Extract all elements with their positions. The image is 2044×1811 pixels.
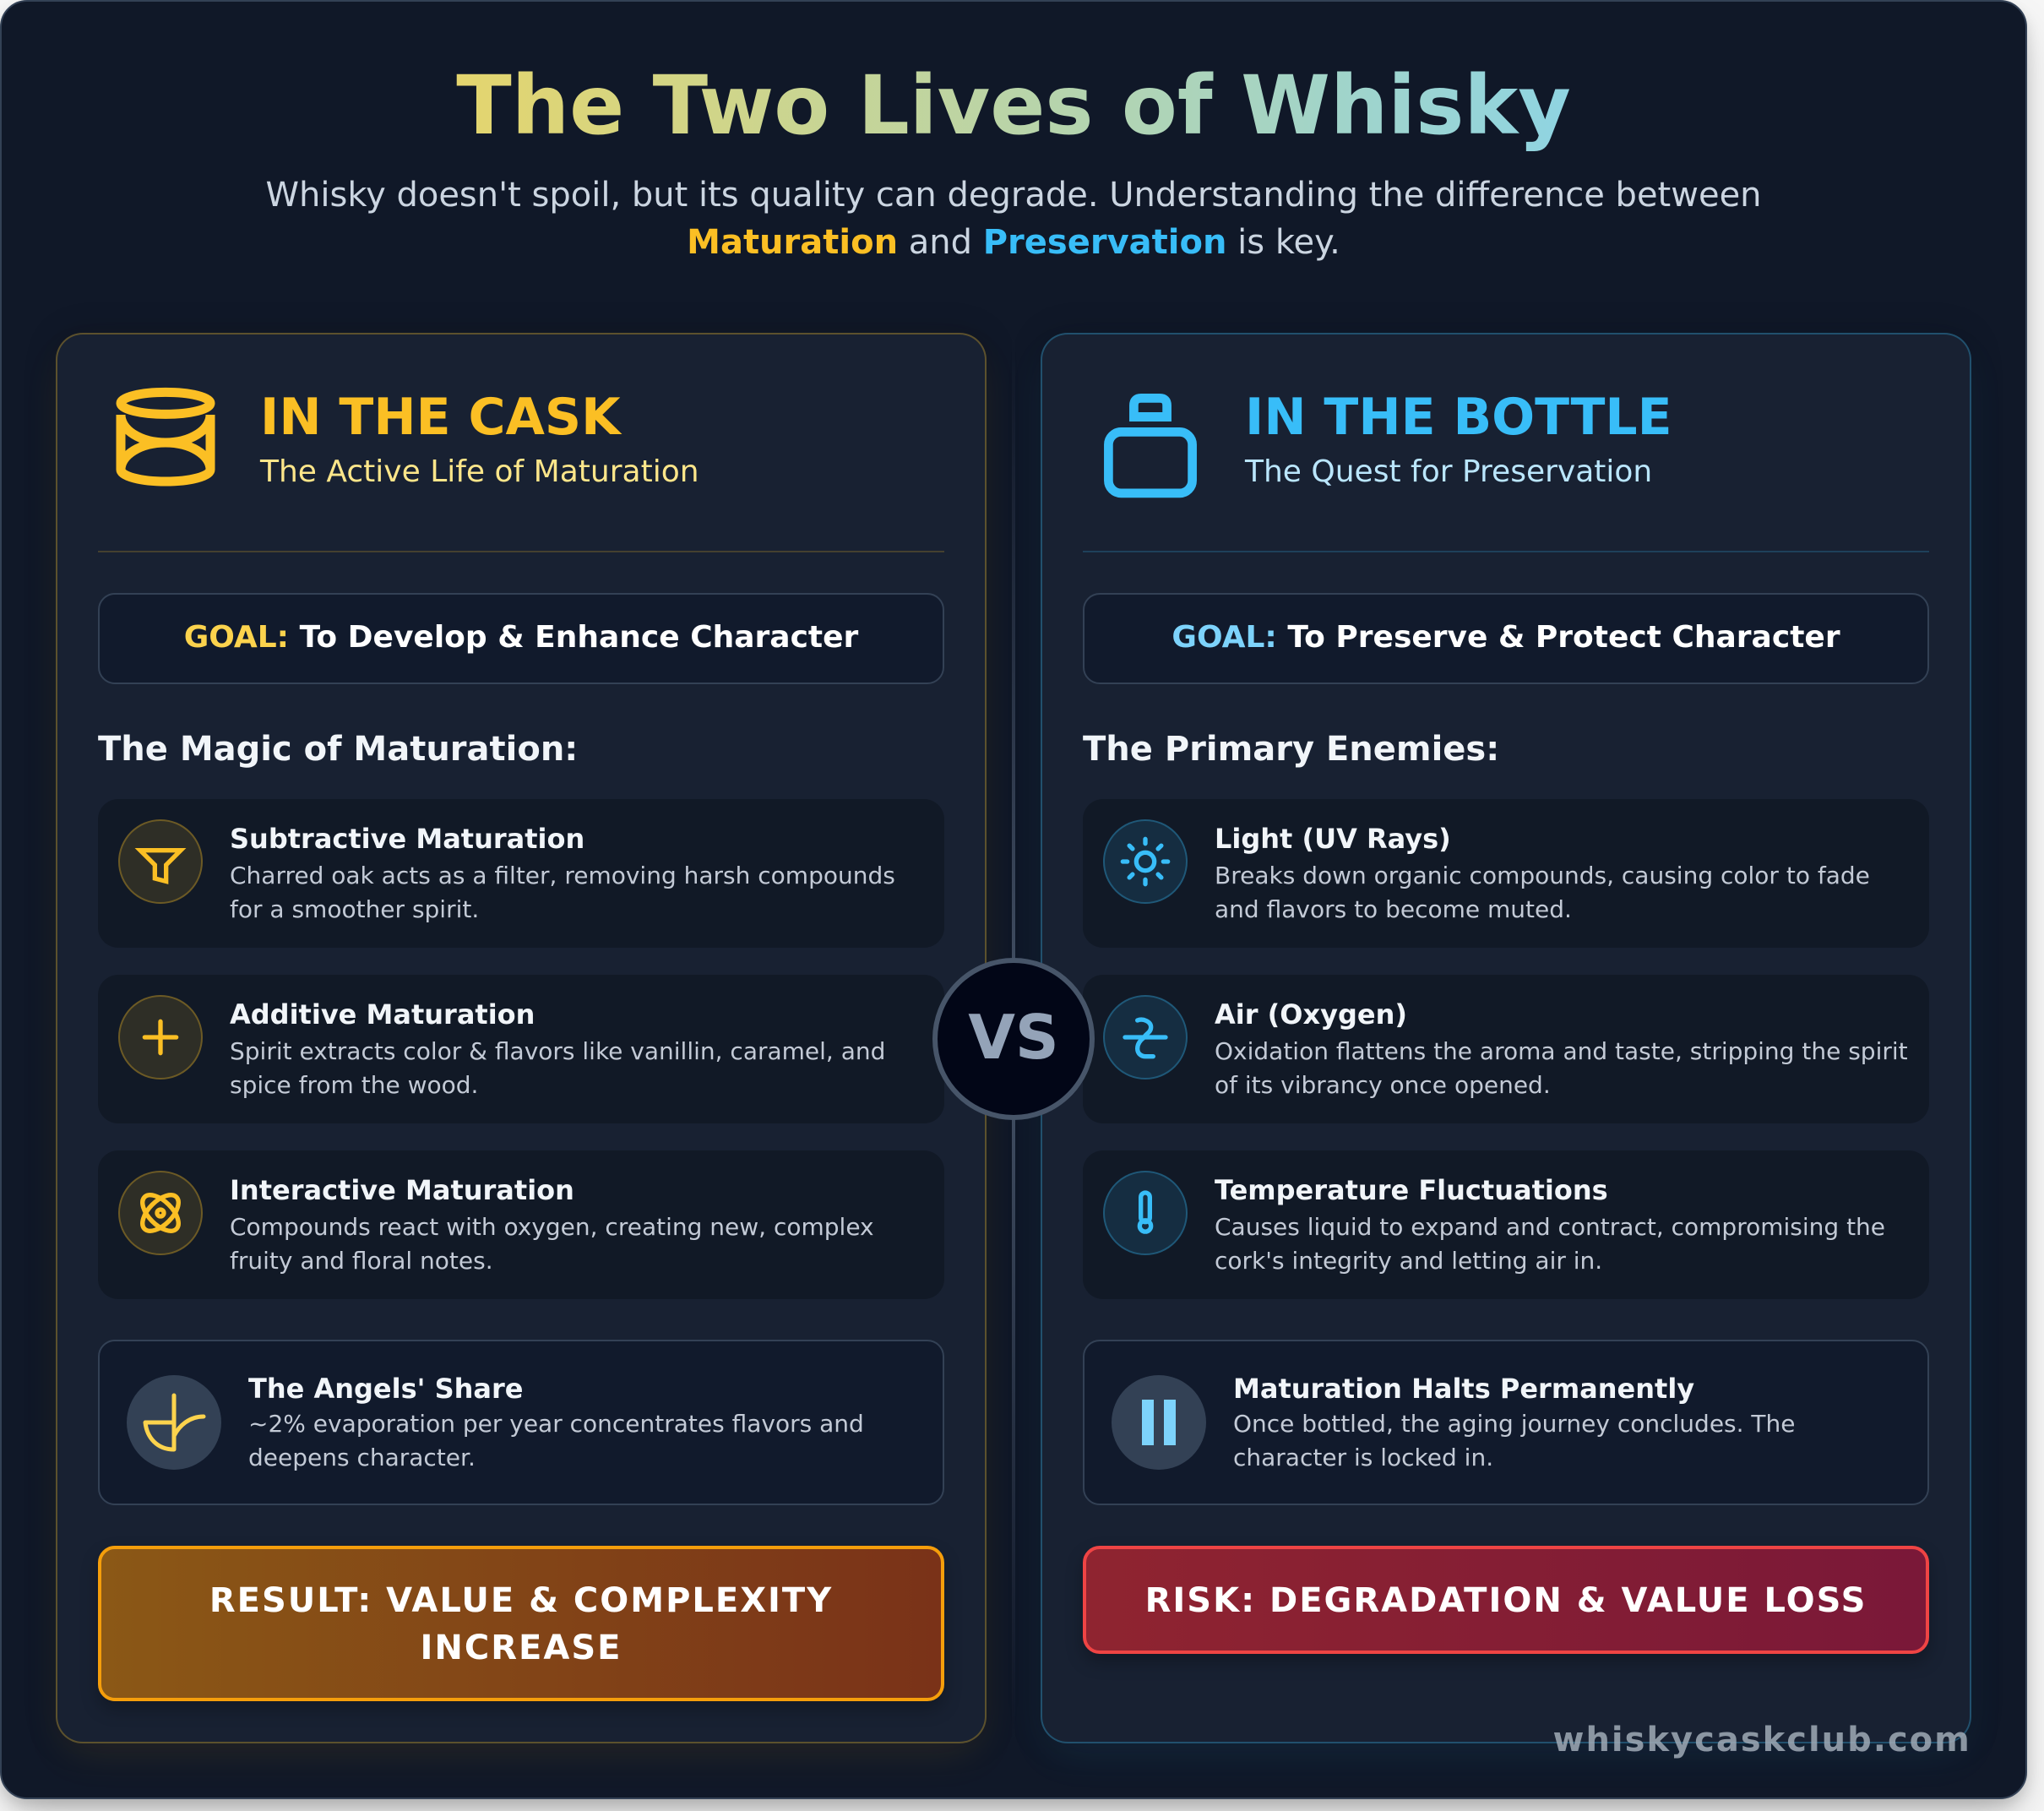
icon: angels share bbox=[144, 1394, 206, 1451]
icon disc: angels share bbox=[127, 1375, 221, 1470]
item card: temperature bbox=[1083, 1150, 1929, 1299]
item text: additive bbox=[230, 1037, 885, 1099]
icon: wind bbox=[1123, 1017, 1168, 1059]
item text: temperature: cork's integrity and letting air in. bbox=[1215, 1247, 1602, 1275]
callout title: angels share: The Angels' Share bbox=[248, 1373, 523, 1405]
subtitle bbox=[265, 176, 1762, 262]
icon: cask bbox=[117, 387, 215, 487]
title: The Two Lives of Whisky bbox=[456, 58, 1571, 153]
icon: filter bbox=[135, 848, 186, 884]
item title: temperature: Temperature Fluctuations bbox=[1215, 1174, 1608, 1206]
item title: light: Light (UV Rays) bbox=[1215, 823, 1451, 855]
icon: plus bbox=[142, 1019, 179, 1056]
item text: light: and flavors to become muted. bbox=[1215, 895, 1572, 923]
item text: temperature: Causes liquid to expand and contract, compromising the bbox=[1215, 1213, 1885, 1241]
callout text: maturation halts: character is locked in. bbox=[1233, 1444, 1493, 1471]
icon circle: thermometer bbox=[1103, 1171, 1188, 1255]
section heading: enemies: The Primary Enemies: bbox=[1083, 730, 1499, 769]
result banner bbox=[98, 1546, 944, 1701]
callout text: maturation halts bbox=[1233, 1410, 1796, 1471]
icon: atom bbox=[140, 1193, 181, 1233]
item card: interactive maturation bbox=[98, 1150, 944, 1299]
icon: thermometer bbox=[1137, 1190, 1154, 1234]
section heading: maturation: The Magic of Maturation: bbox=[98, 730, 578, 769]
risk banner bbox=[1083, 1546, 1929, 1654]
item text: air: of its vibrancy once opened. bbox=[1215, 1071, 1551, 1099]
item card: light bbox=[1083, 799, 1929, 948]
icon circle: atom bbox=[118, 1171, 203, 1255]
heading: in the bottle: IN THE BOTTLE bbox=[1245, 388, 1672, 447]
center divider line bbox=[1012, 333, 1015, 1743]
goal text: cask: GOAL: To Develop & Enhance Character bbox=[184, 620, 858, 655]
icon circle: wind bbox=[1103, 995, 1188, 1080]
item text: subtractive bbox=[230, 862, 895, 923]
watermark: whiskycaskclub.com bbox=[1552, 1721, 1971, 1759]
subheading: active life: The Active Life of Maturation bbox=[260, 454, 699, 489]
item card: air bbox=[1083, 975, 1929, 1123]
callout box: maturation halts bbox=[1083, 1340, 1929, 1505]
result text: RESULT: VALUE & COMPLEXITY bbox=[209, 1581, 833, 1620]
goal text: bottle: GOAL: To Preserve & Protect Character bbox=[1171, 620, 1840, 655]
VS badge: VS bbox=[968, 1002, 1059, 1073]
icon: pause bbox=[1142, 1400, 1176, 1445]
result text bbox=[209, 1581, 833, 1667]
callout title: maturation halts: Maturation Halts Permanently bbox=[1233, 1373, 1694, 1405]
item text: temperature bbox=[1215, 1213, 1885, 1275]
item title: air: Air (Oxygen) bbox=[1215, 998, 1407, 1031]
icon circle: plus bbox=[118, 995, 203, 1080]
icon disc: pause bbox=[1112, 1375, 1206, 1470]
icon: bottle bbox=[1104, 394, 1197, 498]
item text: additive: spice from the wood. bbox=[230, 1071, 478, 1099]
icon: sun bbox=[1120, 836, 1171, 887]
item text: interactive bbox=[230, 1213, 874, 1275]
item card: subtractive maturation bbox=[98, 799, 944, 948]
subheading: preservation: The Quest for Preservation bbox=[1245, 454, 1652, 489]
item title: subtractive: Subtractive Maturation bbox=[230, 823, 584, 855]
icon circle: sun bbox=[1103, 819, 1188, 904]
risk text: RISK: DEGRADATION & VALUE LOSS bbox=[1145, 1581, 1867, 1620]
callout box: angels share bbox=[98, 1340, 944, 1505]
item text: additive: Spirit extracts color & flavors like vanillin, caramel, and bbox=[230, 1037, 885, 1065]
item card: additive maturation bbox=[98, 975, 944, 1123]
panel: in the cask bbox=[56, 333, 987, 1743]
heading: in the cask: IN THE CASK bbox=[260, 388, 621, 447]
subtitle: Maturation and Preservation is key. bbox=[687, 223, 1340, 262]
item text: interactive: Compounds react with oxygen, creating new, complex bbox=[230, 1213, 874, 1241]
item text: subtractive: Charred oak acts as a filter, removing harsh compounds bbox=[230, 862, 895, 889]
callout text: angels share: deepens character. bbox=[248, 1444, 476, 1471]
item text: interactive: fruity and floral notes. bbox=[230, 1247, 493, 1275]
item text: light: Breaks down organic compounds, causing color to fade bbox=[1215, 862, 1870, 889]
callout text: maturation halts: Once bottled, the aging journey concludes. The bbox=[1233, 1410, 1796, 1438]
callout text: angels share: ~2% evaporation per year concentrates flavors and bbox=[248, 1410, 864, 1438]
item text: light bbox=[1215, 862, 1870, 923]
item title: additive: Additive Maturation bbox=[230, 998, 535, 1031]
item title: interactive: Interactive Maturation bbox=[230, 1174, 574, 1206]
item text: air: Oxidation flattens the aroma and taste, stripping the spirit bbox=[1215, 1037, 1908, 1065]
goal box: bottle bbox=[1083, 593, 1929, 684]
panel: in the bottle bbox=[1041, 333, 1971, 1743]
goal box: cask bbox=[98, 593, 944, 684]
icon circle: filter bbox=[118, 819, 203, 904]
callout text: angels share bbox=[248, 1410, 864, 1471]
VS badge bbox=[932, 958, 1095, 1120]
item text: subtractive: for a smoother spirit. bbox=[230, 895, 479, 923]
result text: INCREASE bbox=[421, 1629, 622, 1667]
subtitle: Whisky doesn't spoil, but its quality can degrade. Understanding the difference between bbox=[265, 176, 1762, 215]
item text: air bbox=[1215, 1037, 1908, 1099]
